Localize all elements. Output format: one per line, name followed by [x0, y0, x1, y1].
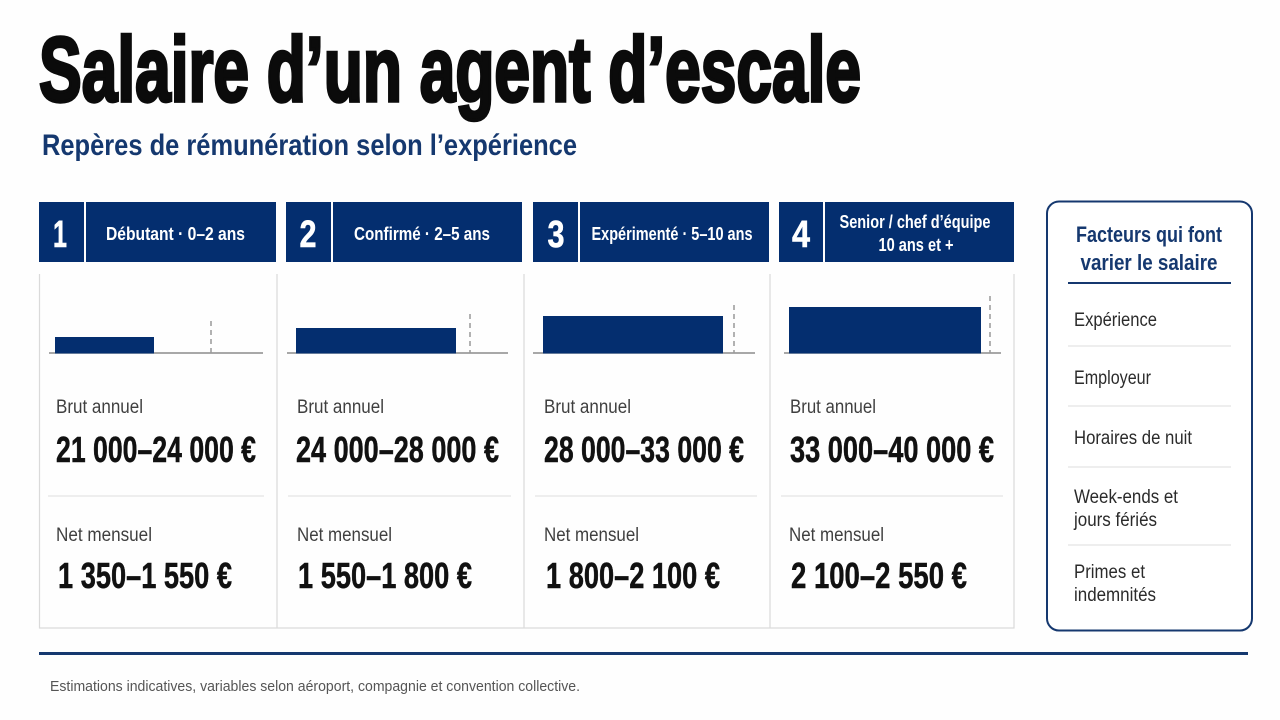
panel: salary table frame	[40, 274, 1014, 628]
level 4 net salary: 2 100–2 550 €	[791, 555, 967, 596]
panel: level 3	[533, 202, 769, 596]
level 1 header: Débutant · 0–2 ans	[106, 224, 245, 244]
level 3 header	[533, 202, 769, 262]
level 1 net salary: 1 350–1 550 €	[58, 555, 232, 596]
level 2 net salary	[297, 525, 472, 596]
factor: weekends and holidays: jours fériés	[1073, 510, 1157, 531]
factor: weekends and holidays: Week-ends et	[1074, 487, 1179, 508]
factors heading: Facteurs qui font	[1076, 222, 1223, 247]
level 1 net salary: Net mensuel	[56, 525, 152, 546]
level 2 gross salary: Brut annuel	[297, 397, 384, 418]
level 2 gross salary	[296, 397, 499, 470]
level 2 header: 2	[300, 214, 316, 256]
subtitle: Repères de rémunération selon l’expérience	[42, 129, 577, 162]
level 4 gross salary: Brut annuel	[790, 397, 876, 418]
level 1 net salary	[56, 525, 232, 596]
level 3 gross salary	[544, 397, 744, 470]
level 4 gross salary	[790, 397, 994, 470]
level 1 gross salary: 21 000–24 000 €	[56, 429, 256, 470]
level 2 header	[286, 202, 522, 262]
level 3 bar chart	[533, 305, 755, 354]
level 1 header	[39, 202, 276, 262]
level 1 gross salary: Brut annuel	[56, 397, 143, 418]
panel: level 4	[779, 202, 1014, 596]
level 4 header: 4	[792, 214, 810, 256]
panel: salary factors	[1047, 202, 1252, 630]
level 2 bar chart	[287, 314, 508, 354]
level 2 header: Confirmé · 2–5 ans	[354, 224, 490, 244]
factor: experience: Expérience	[1074, 310, 1157, 331]
level 2 net salary: 1 550–1 800 €	[298, 555, 472, 596]
level 3 header: Expérimenté · 5–10 ans	[592, 224, 752, 244]
level 4 net salary: Net mensuel	[789, 525, 884, 546]
level 4 header: 10 ans et +	[878, 235, 954, 255]
factor: employer: Employeur	[1074, 368, 1152, 389]
factor: night hours: Horaires de nuit	[1074, 428, 1193, 449]
level 4 gross salary: 33 000–40 000 €	[790, 429, 994, 470]
level 1 header: 1	[53, 214, 67, 256]
level 3 net salary: 1 800–2 100 €	[546, 555, 720, 596]
panel: level 1	[39, 202, 276, 596]
title: Salaire d’un agent d’escale	[39, 19, 861, 121]
level 2 net salary: Net mensuel	[297, 525, 392, 546]
footnote: Estimations indicatives, variables selon aéroport, compagnie et convention collective.	[50, 679, 580, 695]
panel: level 2	[286, 202, 522, 596]
level 1 gross salary	[56, 397, 256, 470]
level 3 net salary	[544, 525, 720, 596]
level 3 gross salary: 28 000–33 000 €	[544, 429, 744, 470]
level 3 net salary: Net mensuel	[544, 525, 639, 546]
factor: bonuses and allowances: Primes et	[1074, 562, 1146, 583]
factor: bonuses and allowances: indemnités	[1074, 585, 1156, 606]
level 1 bar chart	[49, 321, 263, 354]
factor: bonuses and allowances	[1074, 562, 1156, 606]
level 3 header: 3	[548, 214, 564, 256]
level 4 net salary	[789, 525, 967, 596]
factors heading	[1076, 222, 1223, 275]
factor: weekends and holidays	[1073, 487, 1179, 531]
level 4 header	[779, 202, 1014, 262]
level 4 bar chart	[784, 296, 1001, 354]
level 4 header: Senior / chef d’équipe	[840, 212, 990, 232]
factors heading: varier le salaire	[1080, 250, 1218, 275]
level 3 gross salary: Brut annuel	[544, 397, 631, 418]
level 2 gross salary: 24 000–28 000 €	[296, 429, 499, 470]
